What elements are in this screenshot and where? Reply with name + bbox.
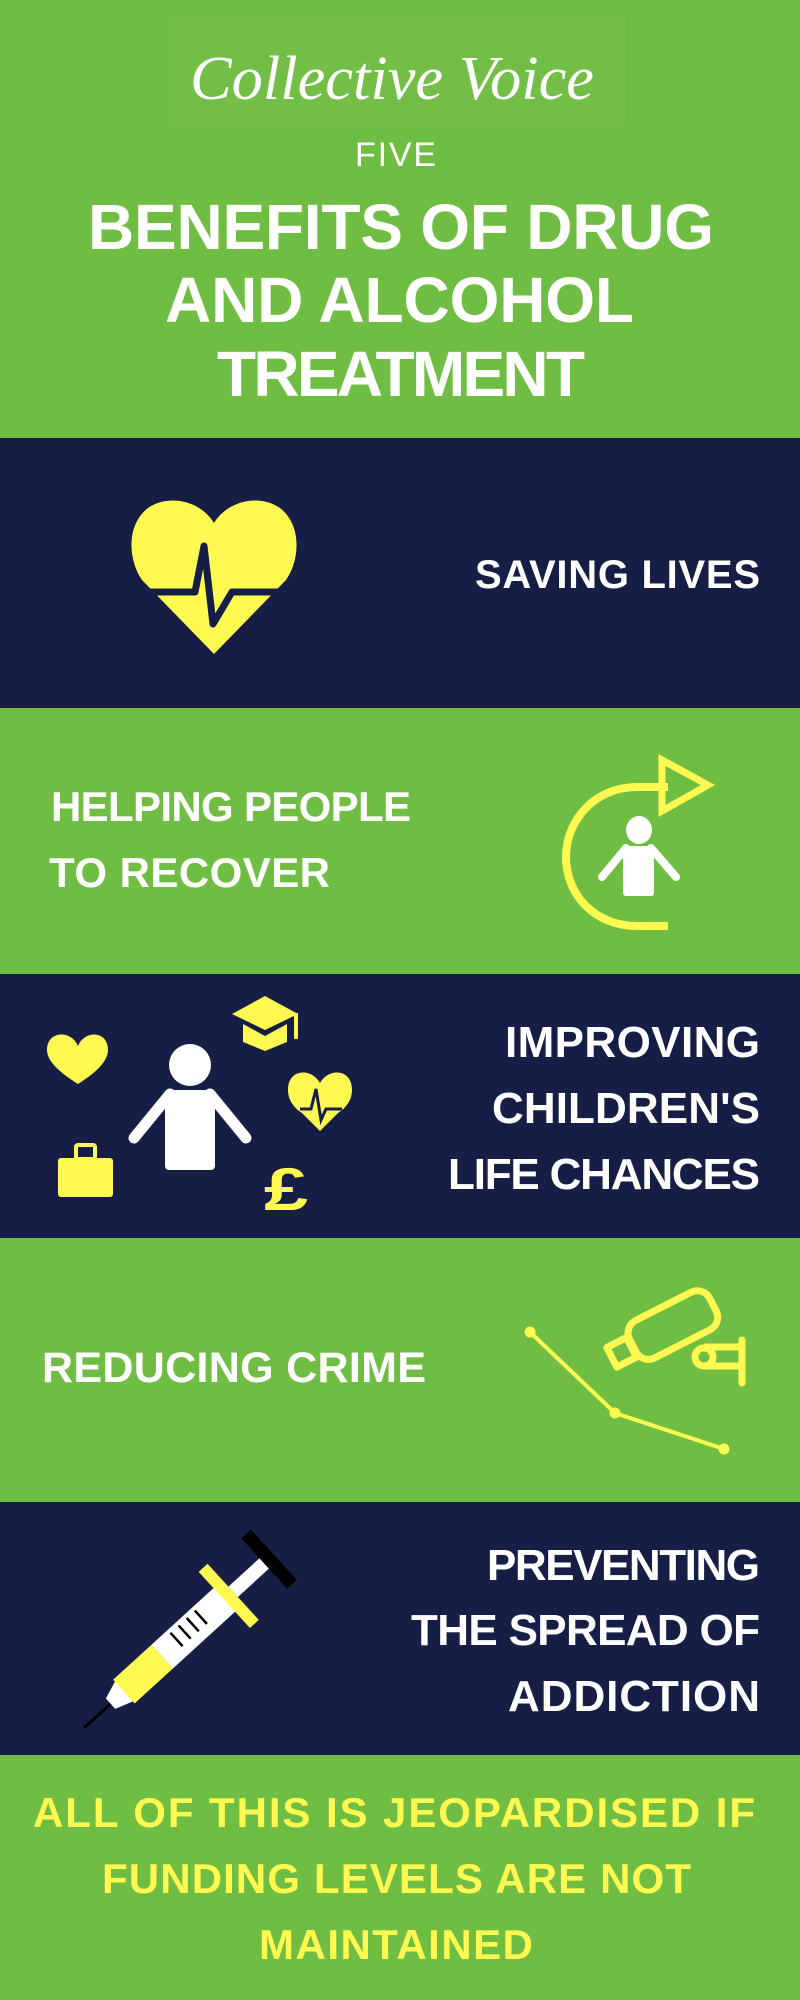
icon: falling line graph	[525, 1327, 729, 1454]
subtitle: FIVE: FIVE	[355, 136, 436, 174]
panel: helping people to recover	[0, 708, 800, 974]
icon: pound sign: £	[264, 1156, 308, 1223]
logo: Collective Voice: Collective Voice	[190, 45, 594, 113]
icon: heart with pulse	[131, 501, 297, 654]
label: improving children's life chances	[448, 1018, 760, 1199]
icon: graduation cap	[232, 996, 298, 1051]
label: saving lives: SAVING LIVES	[475, 553, 760, 597]
label: improving children's life chances: CHILDREN'S	[492, 1084, 760, 1133]
panel: reducing crime	[0, 1238, 800, 1502]
panel: preventing the spread of addiction	[0, 1502, 800, 1756]
label: preventing the spread of addiction	[411, 1541, 760, 1721]
header panel	[0, 0, 800, 438]
panel: saving lives	[0, 438, 800, 708]
warning text: FUNDING LEVELS ARE NOT	[102, 1855, 691, 1902]
label: preventing the spread of addiction: ADDICTION	[508, 1672, 760, 1721]
warning text	[33, 1789, 755, 1968]
label: improving children's life chances: IMPROVING	[505, 1018, 760, 1067]
logo box	[168, 16, 625, 126]
title: AND ALCOHOL	[165, 264, 634, 336]
title: BENEFITS OF DRUG	[88, 191, 714, 263]
icon: CCTV camera	[602, 1286, 742, 1383]
label: preventing the spread of addiction: PREVENTING	[487, 1541, 760, 1590]
panel: improving children's life chances	[0, 974, 800, 1238]
warning text: ALL OF THIS IS JEOPARDISED IF	[33, 1789, 755, 1836]
icon: syringe	[58, 1527, 299, 1756]
label: improving children's life chances: LIFE CHANCES	[448, 1150, 760, 1199]
icon: briefcase	[58, 1145, 113, 1197]
icon: small heart	[47, 1034, 108, 1084]
warning text: MAINTAINED	[259, 1921, 533, 1968]
icon: person	[134, 1044, 246, 1170]
label: reducing crime: REDUCING CRIME	[42, 1344, 426, 1392]
label: helping people to recover	[49, 783, 411, 896]
label: helping people to recover: HELPING PEOPLE	[51, 783, 411, 830]
label: preventing the spread of addiction: THE SPREAD OF	[411, 1606, 760, 1655]
icon: recovery arrow with person	[566, 760, 708, 926]
title: TREATMENT	[217, 338, 585, 410]
title	[88, 191, 714, 410]
icon: heart pulse	[288, 1073, 352, 1131]
label: helping people to recover: TO RECOVER	[49, 849, 330, 896]
panel: funding warning	[0, 1755, 800, 2000]
